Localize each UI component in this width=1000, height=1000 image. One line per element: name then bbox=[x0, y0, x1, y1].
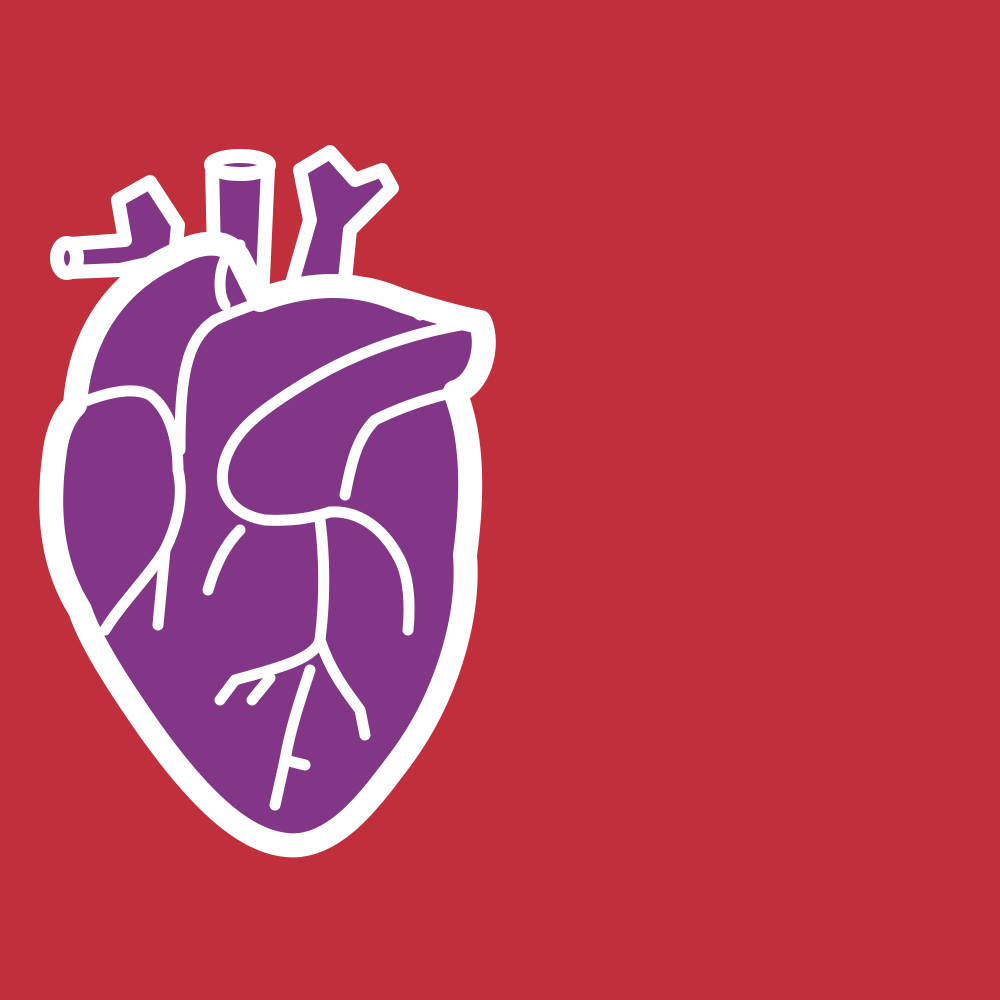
icon: heart bbox=[51, 152, 484, 845]
vessel: top middle bbox=[211, 156, 269, 300]
vessel: top left branch bbox=[57, 182, 178, 273]
heart body bbox=[51, 244, 484, 845]
inner lines bbox=[75, 245, 480, 805]
vessel: top right bbox=[290, 152, 392, 290]
